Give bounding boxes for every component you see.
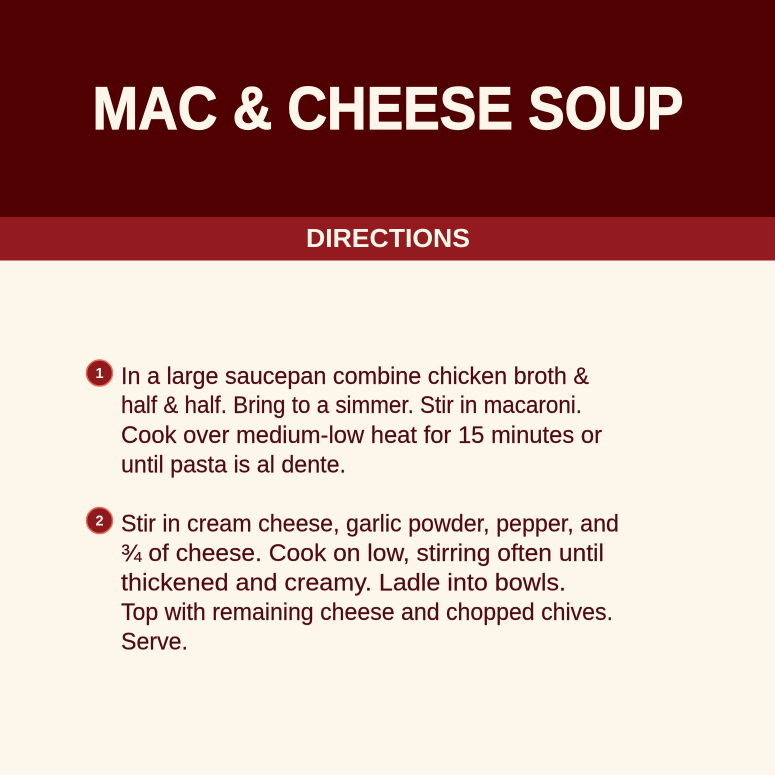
step 2 text: thickened and creamy. Ladle into bowls. (121, 570, 566, 596)
step 2 text: Serve. (121, 628, 188, 656)
directions band (0, 217, 775, 260)
step 1 text: In a large saucepan combine chicken broth & (121, 363, 589, 390)
step 2 badge (86, 508, 112, 534)
step 1 text: half & half. Bring to a simmer. Stir in macaroni. (121, 392, 582, 419)
step 2 text: Stir in cream cheese, garlic powder, pepper, and (121, 510, 619, 538)
title: MAC & CHEESE SOUP (92, 75, 684, 142)
directions heading: DIRECTIONS (306, 223, 470, 253)
step 1 text: until pasta is al dente. (121, 452, 346, 478)
step 1 text: Cook over medium-low heat for 15 minutes or (121, 422, 602, 449)
step 1 badge (86, 360, 112, 386)
step 2 text: Top with remaining cheese and chopped chives. (121, 599, 613, 626)
step 2 text: ¾ of cheese. Cook on low, stirring often until (121, 540, 604, 567)
step 1 text (121, 363, 602, 478)
step 2 badge: 2 (95, 514, 104, 530)
step 2 text (121, 510, 619, 656)
header band (0, 0, 775, 217)
step 1 badge: 1 (95, 366, 104, 382)
